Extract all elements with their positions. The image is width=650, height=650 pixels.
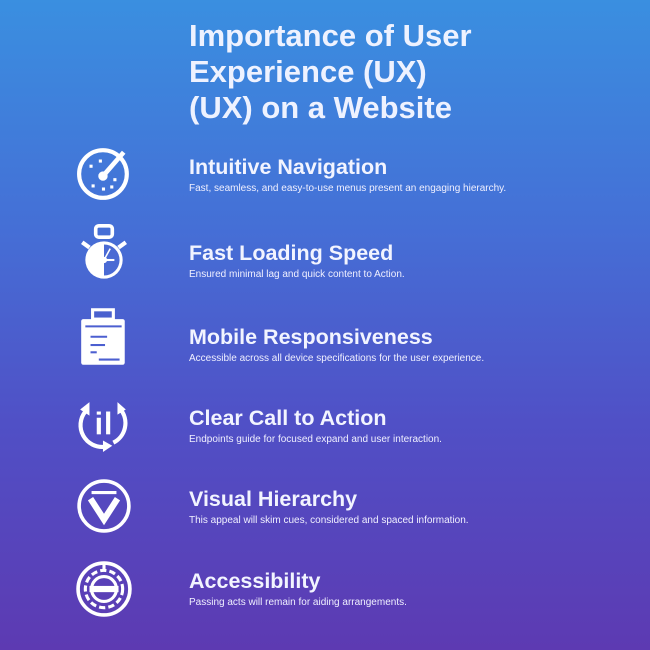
item: visual hierarchy: This appeal will skim cues, considered and spaced information. bbox=[189, 515, 469, 526]
item: fast loading speed: Fast Loading Speed bbox=[189, 241, 393, 265]
title bbox=[189, 18, 472, 125]
item: clear call to action: Endpoints guide for focused expand and user interaction. bbox=[189, 434, 442, 445]
item: mobile responsiveness bbox=[81, 308, 484, 365]
item: mobile responsiveness: Accessible across all device specifications for the user experience. bbox=[189, 353, 484, 364]
item: accessibility bbox=[76, 561, 407, 617]
icon: cycle bbox=[78, 402, 128, 452]
title: (UX) on a Website bbox=[189, 90, 452, 125]
item: mobile responsiveness: Mobile Responsiveness bbox=[189, 325, 433, 349]
item: visual hierarchy bbox=[77, 479, 469, 533]
item: visual hierarchy: Visual Hierarchy bbox=[189, 487, 357, 511]
item: fast loading speed: Ensured minimal lag and quick content to Action. bbox=[189, 269, 405, 280]
item: fast loading speed bbox=[81, 224, 405, 280]
title: Experience (UX) bbox=[189, 54, 427, 89]
item: clear call to action bbox=[78, 402, 442, 452]
item: intuitive navigation: Intuitive Navigation bbox=[189, 155, 387, 179]
item: intuitive navigation bbox=[77, 148, 506, 200]
item: clear call to action: Clear Call to Action bbox=[189, 406, 387, 430]
icon: chevron circle bbox=[77, 479, 131, 533]
icon: stopwatch bbox=[81, 224, 127, 279]
item: intuitive navigation: Fast, seamless, and easy-to-use menus present an engaging hierarchy. bbox=[189, 183, 506, 194]
icon: gauge bbox=[77, 148, 129, 200]
item: accessibility: Passing acts will remain for aiding arrangements. bbox=[189, 597, 407, 608]
icon: ring bbox=[76, 561, 132, 617]
item: accessibility: Accessibility bbox=[189, 569, 320, 593]
title: Importance of User bbox=[189, 18, 472, 53]
icon: toolbox bbox=[81, 308, 125, 365]
